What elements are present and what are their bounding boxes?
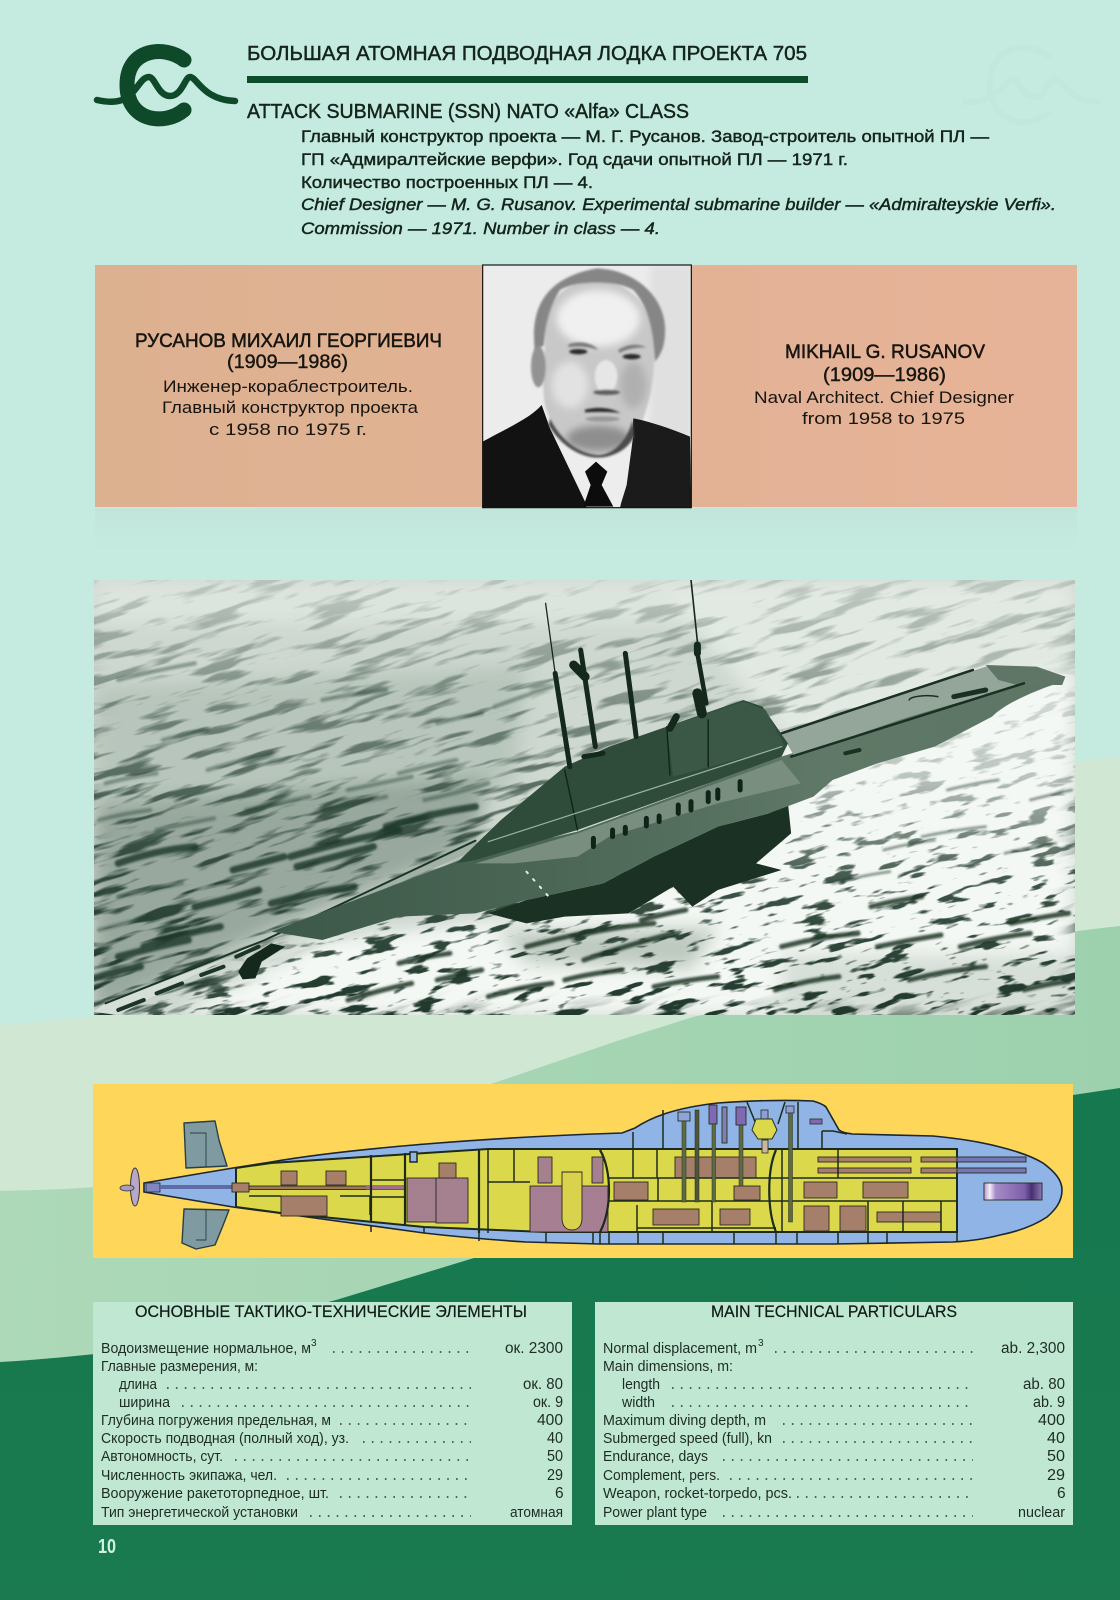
row labels bbox=[603, 1338, 792, 1521]
row values: ab. 9 bbox=[1033, 1394, 1065, 1411]
biography text (English): Naval Architect. Chief Designer bbox=[754, 388, 1014, 407]
row labels: Водоизмещение нормальное, м bbox=[101, 1340, 311, 1357]
dot leaders bbox=[167, 1352, 471, 1516]
biography text (Russian): (1909—1986) bbox=[227, 352, 348, 373]
suit bbox=[483, 405, 587, 508]
row labels: Автономность, сут. bbox=[101, 1448, 223, 1465]
row values: 29 bbox=[1047, 1467, 1065, 1484]
sail bbox=[456, 700, 788, 863]
panel: chief designer biography bbox=[95, 265, 1077, 507]
row labels bbox=[101, 1338, 349, 1521]
row labels: width bbox=[621, 1394, 655, 1411]
row labels: Maximum diving depth, m bbox=[603, 1412, 766, 1429]
dark wave streaks bbox=[94, 663, 1072, 1000]
shadow under hull bbox=[488, 806, 792, 924]
biography text (English): MIKHAIL G. RUSANOV bbox=[785, 342, 985, 363]
masts and periscopes bbox=[678, 1105, 822, 1222]
main hull bbox=[271, 682, 1062, 940]
row labels: Normal displacement, m bbox=[603, 1340, 757, 1357]
dot leaders bbox=[672, 1352, 973, 1516]
table heading: MAIN TECHNICAL PARTICULARS bbox=[711, 1303, 957, 1321]
bulkheads and decks bbox=[249, 1102, 957, 1244]
row values: nuclear bbox=[1018, 1505, 1065, 1521]
bow casing bbox=[782, 667, 1065, 757]
title (English): ATTACK SUBMARINE (SSN) NATO «Alfa» CLASS bbox=[247, 101, 689, 123]
row labels: Power plant type bbox=[603, 1504, 707, 1521]
project summary text: Commission — 1971. Number in class — 4. bbox=[301, 219, 660, 238]
row values: атомная bbox=[510, 1505, 563, 1521]
row labels: Complement, pers. bbox=[603, 1467, 720, 1484]
row labels: Submerged speed (full), kn bbox=[603, 1430, 772, 1447]
row values: ок. 9 bbox=[533, 1394, 563, 1411]
biography text (English) bbox=[754, 342, 1014, 428]
row values: 6 bbox=[555, 1485, 564, 1502]
row values: ab. 80 bbox=[1023, 1376, 1065, 1393]
row values: ок. 2300 bbox=[505, 1340, 563, 1357]
row labels: Endurance, days bbox=[603, 1448, 708, 1465]
row labels: длина bbox=[119, 1376, 158, 1393]
title rule bbox=[247, 76, 808, 83]
photo: submarine at sea bbox=[94, 580, 1075, 1015]
panel: main technical particulars (English) bbox=[595, 1302, 1073, 1525]
biography text (Russian) bbox=[135, 331, 442, 439]
water ripple texture: left bbox=[94, 580, 1075, 1015]
equipment compartments bbox=[232, 1157, 1042, 1232]
row labels: Скорость подводная (полный ход), уз. bbox=[101, 1430, 349, 1447]
row values: ab. 2,300 bbox=[1001, 1340, 1065, 1357]
row values: 50 bbox=[547, 1448, 563, 1465]
project summary text: ГП «Адмиралтейские верфи». Год сдачи опытной ПЛ — 1971 г. bbox=[301, 150, 848, 169]
hull windows bbox=[593, 782, 740, 847]
hair bbox=[534, 268, 665, 362]
table heading: ОСНОВНЫЕ ТАКТИКО-ТЕХНИЧЕСКИЕ ЭЛЕМЕНТЫ bbox=[135, 1303, 527, 1321]
row labels: Main dimensions, m: bbox=[603, 1358, 733, 1375]
biography text (Russian): Инженер-кораблестроитель. bbox=[163, 377, 413, 396]
row labels: Вооружение ракетоторпедное, шт. bbox=[101, 1485, 329, 1502]
row labels: 3 bbox=[758, 1338, 764, 1349]
row values: 400 bbox=[1038, 1412, 1065, 1429]
row labels: Главные размерения, м: bbox=[101, 1358, 258, 1375]
row labels: Тип энергетической установки bbox=[101, 1504, 298, 1521]
row values: 40 bbox=[1047, 1430, 1065, 1447]
row values: 400 bbox=[537, 1412, 563, 1429]
diagram: submarine cutaway profile bbox=[93, 1084, 1073, 1258]
row labels: Weapon, rocket-torpedo, pcs. bbox=[603, 1485, 792, 1502]
row values: 50 bbox=[1047, 1448, 1065, 1465]
row values bbox=[1001, 1340, 1066, 1521]
project summary text: Главный конструктор проекта — М. Г. Русанов. Завод-строитель опытной ПЛ — bbox=[301, 127, 989, 146]
biography text (English): from 1958 to 1975 bbox=[802, 409, 965, 428]
biography text (Russian): Главный конструктор проекта bbox=[162, 398, 419, 417]
facial features bbox=[568, 342, 647, 422]
biography text (Russian): РУСАНОВ МИХАИЛ ГЕОРГИЕВИЧ bbox=[135, 331, 442, 352]
hull outline bbox=[144, 1100, 1062, 1244]
title (Russian): БОЛЬШАЯ АТОМНАЯ ПОДВОДНАЯ ЛОДКА ПРОЕКТА 705 bbox=[247, 43, 807, 65]
page number: 10 bbox=[98, 1536, 116, 1558]
icon: shipbuilder logo bbox=[97, 52, 235, 119]
row labels: 3 bbox=[311, 1338, 317, 1349]
project summary text bbox=[301, 127, 1056, 238]
row values: 6 bbox=[1057, 1485, 1066, 1502]
collar and tie bbox=[566, 435, 634, 506]
biography text (English): (1909—1986) bbox=[823, 365, 946, 386]
project summary text: Chief Designer — M. G. Rusanov. Experimental submarine builder — «Admiralteyskie Verfi». bbox=[301, 195, 1056, 214]
row values bbox=[505, 1340, 564, 1521]
portrait of M. G. Rusanov bbox=[483, 265, 693, 508]
pressure hull interior bbox=[236, 1149, 957, 1232]
shaft and hub bbox=[146, 1183, 234, 1192]
panel: main technical particulars (Russian) bbox=[93, 1302, 572, 1525]
propeller bbox=[120, 1168, 140, 1206]
stern rudders bbox=[182, 1121, 229, 1249]
water tone fields bbox=[94, 580, 1075, 1015]
row values: 29 bbox=[547, 1467, 563, 1484]
masts bbox=[546, 580, 706, 767]
row labels: length bbox=[622, 1376, 660, 1393]
row values: 40 bbox=[547, 1430, 563, 1447]
row values: ок. 80 bbox=[523, 1376, 563, 1393]
row labels: Глубина погружения предельная, м bbox=[101, 1412, 331, 1429]
face bbox=[543, 280, 654, 455]
row labels: ширина bbox=[119, 1394, 171, 1411]
row labels: Численность экипажа, чел. bbox=[101, 1467, 277, 1484]
water ripple texture: right bbox=[94, 648, 1075, 1015]
header text block bbox=[247, 43, 1056, 238]
project summary text: Количество построенных ПЛ — 4. bbox=[301, 173, 593, 192]
biography text (Russian): с 1958 по 1975 г. bbox=[209, 420, 367, 439]
aft casing and tail bbox=[93, 841, 481, 1015]
